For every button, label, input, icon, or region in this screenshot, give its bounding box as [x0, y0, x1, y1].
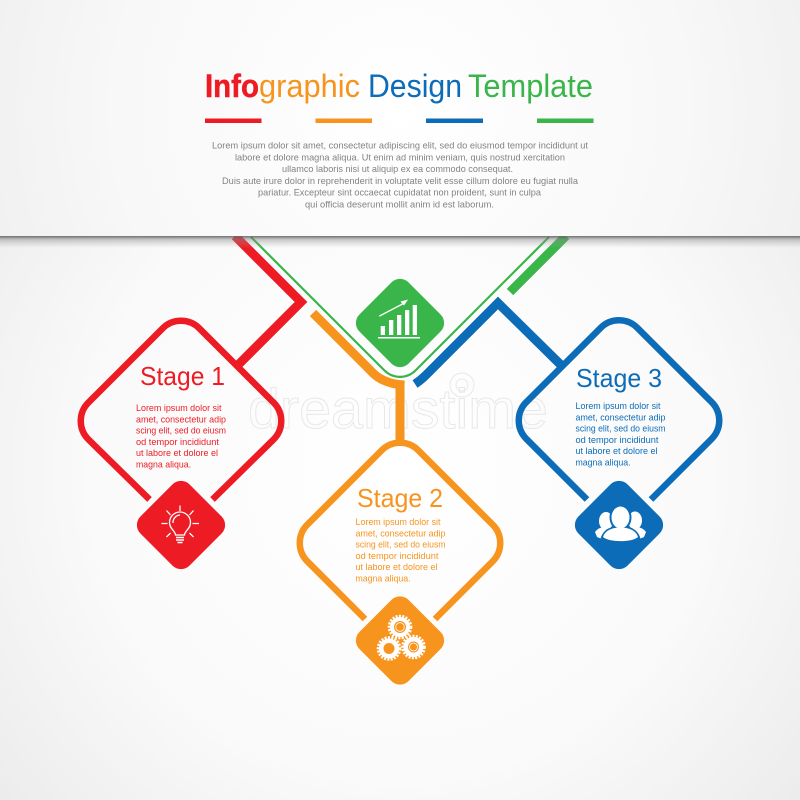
panel: stage 2 — [300, 443, 500, 690]
stage 3 heading: Stage 3 — [576, 363, 662, 393]
title: Design — [368, 68, 462, 104]
stage 1 text: od tempor incididunt — [136, 437, 219, 447]
stage 1 heading: Stage 1 — [140, 361, 225, 391]
intro text: ullamco laboris nisi ut aliquip ex ea commodo consequat. — [282, 164, 513, 174]
connector: orange — [313, 313, 404, 445]
stage 2 text: od tempor incididunt — [356, 551, 439, 561]
stage 2 text: scing elit, sed do eiusm — [356, 540, 446, 550]
stage 2 text: ut labore et dolore el — [356, 562, 438, 572]
stage 3 outline — [519, 320, 719, 500]
stage 3 text: scing elit, sed do eiusm — [576, 424, 666, 434]
icon: gears — [351, 591, 449, 690]
stage 2 outline — [300, 443, 500, 619]
watermark: dreamstime — [248, 377, 548, 440]
icon: people — [570, 476, 668, 574]
connector: green bar — [510, 236, 566, 292]
stage 1 text: Lorem ipsum dolor sit — [136, 403, 222, 413]
intro text: pariatur. Excepteur sint occaecat cupidatat non proident, sunt in culpa — [258, 188, 542, 198]
stage 2 text: magna aliqua. — [356, 574, 410, 584]
stage 3 text: ut labore et dolore el — [576, 446, 658, 456]
stage 3 text: amet, consectetur adip — [576, 412, 666, 422]
panel: stage 3 — [519, 320, 719, 574]
panel: header — [0, 0, 800, 236]
header shadow — [0, 236, 800, 248]
stage 2 text: amet, consectetur adip — [356, 528, 446, 538]
icon: lightbulb — [132, 476, 230, 574]
stage 3 text: od tempor incididunt — [576, 435, 659, 445]
intro text: labore et dolore magna aliqua. Ut enim ad minim veniam, quis nostrud xercitation — [235, 152, 565, 162]
connector: blue — [415, 303, 564, 384]
intro text — [212, 140, 588, 209]
title: Template — [468, 68, 593, 104]
intro text: Lorem ipsum dolor sit amet, consectetur adipiscing elit, sed do eiusmod tempor incididunt ut — [212, 140, 588, 150]
title underlines — [205, 118, 594, 123]
stage 3 text: Lorem ipsum dolor sit — [576, 401, 661, 411]
stage 1 text: amet, consectetur adip — [136, 414, 226, 424]
stage 2 heading: Stage 2 — [357, 483, 443, 513]
stage 2 text — [356, 517, 446, 584]
title — [205, 68, 593, 104]
stage 1 text — [136, 403, 226, 470]
connector: green outline — [251, 237, 549, 377]
stage 2 text: Lorem ipsum dolor sit — [356, 517, 441, 527]
stage 1 text: ut labore et dolore el — [136, 448, 218, 458]
stage 1 text: scing elit, sed do eiusm — [136, 426, 226, 436]
title: graphic — [259, 68, 360, 104]
connector: red — [235, 236, 301, 367]
icon: growth chart — [351, 274, 449, 372]
intro text: qui officia deserunt mollit anim id est laborum. — [305, 199, 494, 209]
stage 3 text — [576, 401, 666, 468]
intro text: Duis aute irure dolor in reprehenderit in voluptate velit esse cillum dolore eu fugiat nulla — [222, 176, 579, 186]
stage 3 text: magna aliqua. — [576, 458, 630, 468]
stage 1 outline — [81, 321, 281, 500]
panel: stage 1 — [81, 321, 281, 574]
stage 1 text: magna aliqua. — [136, 460, 191, 470]
title: Info — [205, 68, 259, 104]
